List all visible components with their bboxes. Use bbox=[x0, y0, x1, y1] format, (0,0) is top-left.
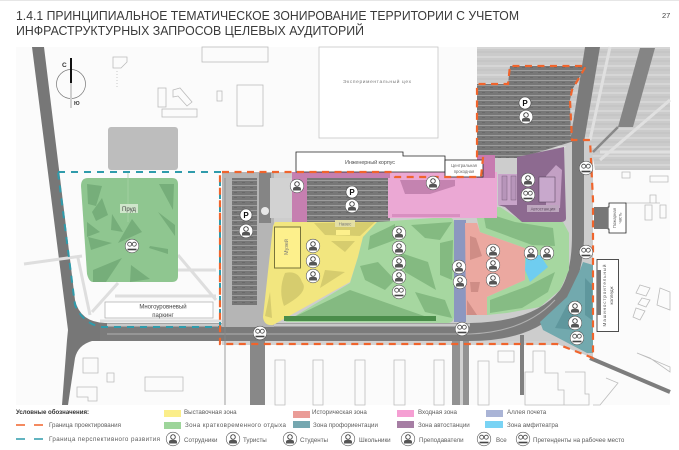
pond label: Пруд bbox=[122, 207, 136, 213]
canopy label bbox=[335, 220, 355, 235]
central checkpoint: проходная bbox=[454, 169, 474, 174]
compass: Ю bbox=[74, 101, 80, 107]
legend zone swatches bbox=[164, 409, 559, 429]
yellow zone darker beds bbox=[265, 222, 375, 318]
machine-building college bbox=[597, 260, 618, 332]
fire station: часть bbox=[618, 212, 622, 223]
central checkpoint: Центральная bbox=[451, 163, 477, 168]
main road along the south bbox=[100, 47, 600, 341]
top right parking bbox=[477, 66, 586, 158]
icon: parking markers: P bbox=[243, 211, 249, 220]
bus station label bbox=[527, 205, 559, 212]
legend boundary lines bbox=[16, 422, 160, 443]
panel: amphitheatre zone bbox=[525, 255, 548, 282]
legend audience icons: Школьники bbox=[359, 437, 391, 444]
site plan base map bbox=[16, 47, 670, 405]
legend zone swatches: Зона кратковременного отдыха bbox=[185, 422, 287, 429]
legend audience icons: Все bbox=[496, 437, 507, 444]
panel: recreation zone east bbox=[476, 207, 569, 315]
engineering building: Инженерный корпус bbox=[345, 159, 395, 166]
legend zone swatches: Зона амфитеатра bbox=[507, 422, 559, 429]
legend bbox=[16, 409, 625, 446]
legend boundary lines: Граница перспективного развития bbox=[49, 436, 160, 443]
panel: recreation zone green bbox=[284, 217, 454, 323]
perspective development boundary bbox=[58, 172, 220, 327]
south side streets bbox=[250, 341, 265, 405]
legend zone swatches: Выставочная зона bbox=[184, 409, 237, 416]
multi-level parking label: Многоуровневый bbox=[139, 304, 187, 310]
legend heading: Условные обозначения: bbox=[16, 409, 89, 416]
multi-level parking label bbox=[105, 302, 213, 319]
fire station bbox=[594, 203, 626, 233]
pond label bbox=[120, 204, 138, 213]
far right tree row bbox=[618, 48, 655, 127]
faint buildings bbox=[77, 47, 670, 405]
title bbox=[16, 9, 519, 38]
central parking bbox=[300, 175, 390, 222]
legend audience icons: Претенденты на рабочее место bbox=[533, 437, 625, 444]
icon: parking markers bbox=[240, 97, 531, 221]
panel: bus station zone bbox=[498, 147, 566, 222]
upper right textured ground bbox=[477, 47, 670, 170]
left road bbox=[32, 47, 105, 405]
central checkpoint bbox=[445, 160, 483, 177]
machine-building college: Машиностроительный bbox=[601, 264, 607, 326]
icon: parking markers: P bbox=[522, 99, 528, 108]
panel: career guidance zone bbox=[540, 262, 593, 353]
legend zone swatches: Историческая зона bbox=[312, 409, 367, 416]
site ground bbox=[222, 140, 593, 358]
legend zone swatches: Зона профориентации bbox=[313, 422, 378, 429]
legend audience icons: Туристы bbox=[243, 437, 267, 444]
legend zone swatches: Входная зона bbox=[418, 409, 458, 416]
west site pale roads bbox=[24, 255, 222, 321]
machine-building college: колледж bbox=[609, 286, 614, 305]
grey roof block bbox=[108, 127, 178, 170]
west site paved bbox=[222, 172, 274, 327]
legend zone swatches: Аллея почета bbox=[507, 409, 547, 416]
legend zone swatches: Зона автостанции bbox=[418, 422, 470, 429]
panel: historical zone bbox=[465, 223, 525, 315]
top page rule bbox=[0, 0, 679, 1]
experimental workshop label: Экспериментальный цех bbox=[343, 78, 412, 85]
legend audience icons: Преподаватели bbox=[419, 437, 464, 444]
multi-level parking label: паркинг bbox=[152, 313, 175, 319]
icons: audience markers on the map bbox=[125, 110, 593, 345]
bus station label: Автостанция bbox=[531, 206, 555, 212]
museum bbox=[274, 227, 300, 268]
museum: Музей bbox=[283, 239, 290, 255]
fire station: Пожарная bbox=[612, 207, 617, 228]
design boundary bbox=[220, 66, 593, 358]
engineering building bbox=[296, 152, 445, 172]
panel: pond green zone bbox=[81, 172, 178, 282]
legend audience icons: Сотрудники bbox=[184, 437, 218, 444]
panel: alley of honour bbox=[454, 220, 466, 322]
experimental workshop bbox=[319, 47, 438, 138]
legend audience icons: Студенты bbox=[300, 437, 329, 444]
compass bbox=[56, 58, 86, 108]
page number: 27 bbox=[662, 11, 670, 20]
title: 1.4.1 ПРИНЦИПИАЛЬНОЕ ТЕМАТИЧЕСКОЕ ЗОНИРОВАНИЕ ТЕРРИТОРИИ С УЧЕТОМ bbox=[16, 9, 519, 23]
legend audience icons bbox=[166, 432, 625, 446]
compass: С bbox=[62, 62, 67, 69]
panel: entrance zone bbox=[292, 155, 497, 222]
title: ИНФРАСТРУКТУРНЫХ ЗАПРОСОВ ЦЕЛЕВЫХ АУДИТОРИЙ bbox=[16, 23, 364, 38]
canopy label: Навес bbox=[339, 222, 352, 226]
icon: parking markers: P bbox=[349, 188, 355, 197]
legend boundary lines: Граница проектирования bbox=[49, 422, 121, 429]
panel: exhibition zone yellow bbox=[263, 222, 377, 325]
